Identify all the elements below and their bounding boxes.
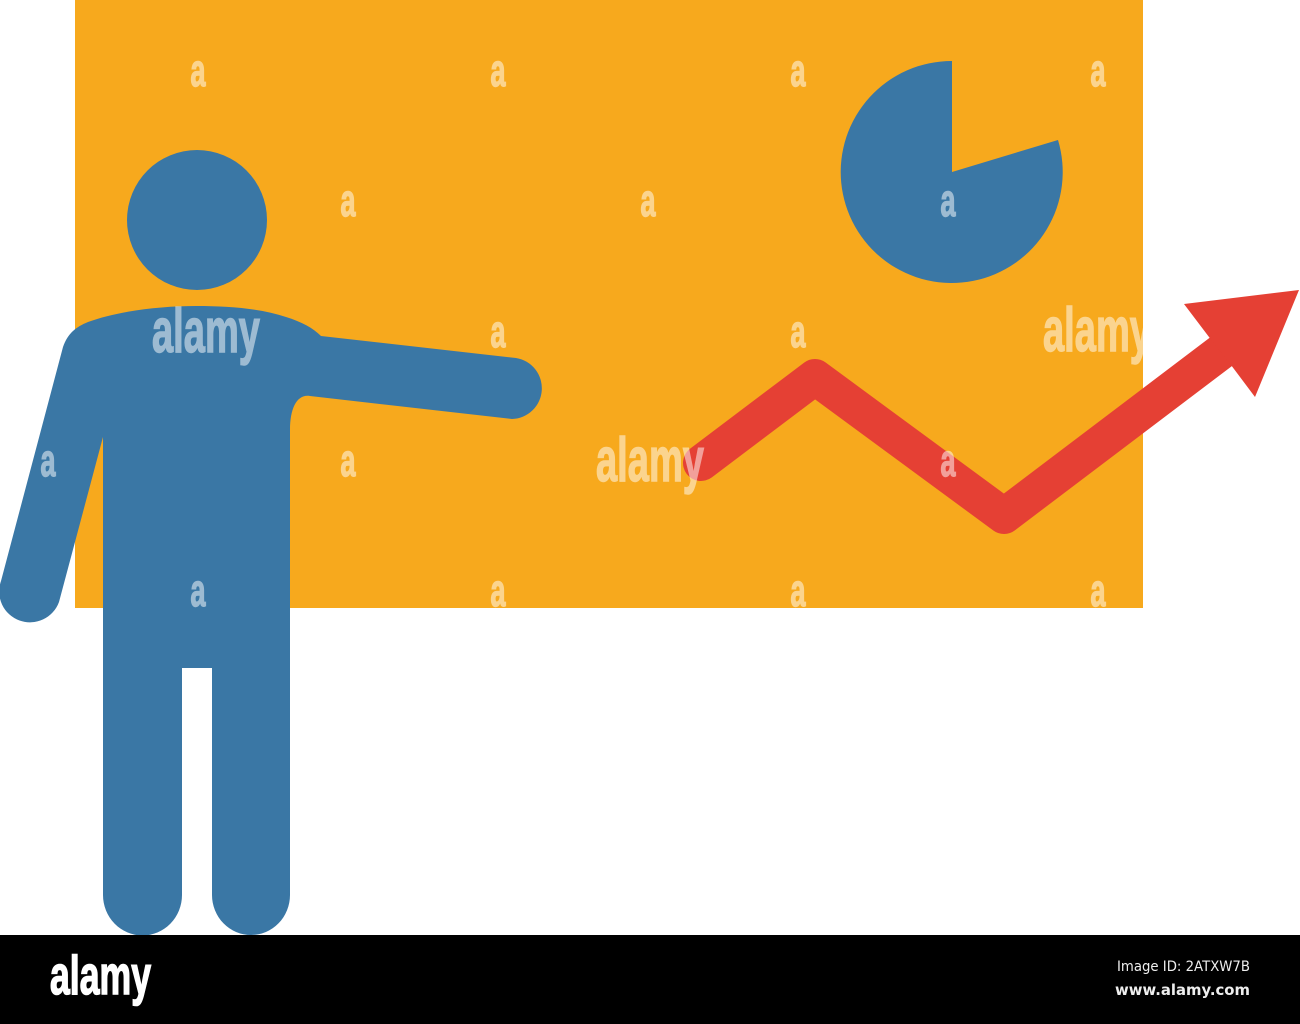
watermark pattern: a bbox=[490, 45, 506, 96]
watermark pattern: alamy bbox=[596, 426, 704, 495]
watermark pattern: a bbox=[940, 435, 956, 486]
panel: orange presentation board bbox=[75, 0, 1143, 608]
watermark pattern: a bbox=[790, 306, 806, 357]
watermark pattern: a bbox=[190, 45, 206, 96]
panel: black footer bar bbox=[0, 935, 1300, 1024]
icon: pie chart with missing slice bbox=[841, 61, 1063, 283]
watermark pattern: a bbox=[1090, 565, 1106, 616]
watermark pattern: a bbox=[1090, 45, 1106, 96]
watermark pattern: a bbox=[490, 565, 506, 616]
watermark pattern: a bbox=[790, 45, 806, 96]
watermark pattern: a bbox=[790, 565, 806, 616]
watermark pattern: a bbox=[190, 565, 206, 616]
presenter body with arms and legs bbox=[0, 306, 542, 936]
arrow: red rising trend line bbox=[701, 290, 1299, 516]
footer logo: alamy bbox=[50, 944, 151, 1006]
website url: www.alamy.com bbox=[1115, 981, 1250, 999]
watermark pattern: alamy bbox=[152, 297, 260, 366]
trend line stroke bbox=[701, 351, 1222, 516]
watermark pattern: a bbox=[340, 435, 356, 486]
watermark pattern: a bbox=[640, 175, 656, 226]
watermark pattern: a bbox=[340, 175, 356, 226]
image id: Image ID: 2ATXW7B bbox=[1117, 959, 1250, 975]
watermark pattern bbox=[40, 45, 1151, 616]
watermark pattern: a bbox=[940, 175, 956, 226]
arrowhead bbox=[1184, 290, 1299, 397]
watermark pattern: alamy bbox=[1043, 296, 1151, 365]
watermark pattern: a bbox=[490, 306, 506, 357]
icon: presenter figure bbox=[0, 150, 542, 936]
presenter head bbox=[127, 150, 267, 290]
watermark pattern: a bbox=[40, 435, 56, 486]
